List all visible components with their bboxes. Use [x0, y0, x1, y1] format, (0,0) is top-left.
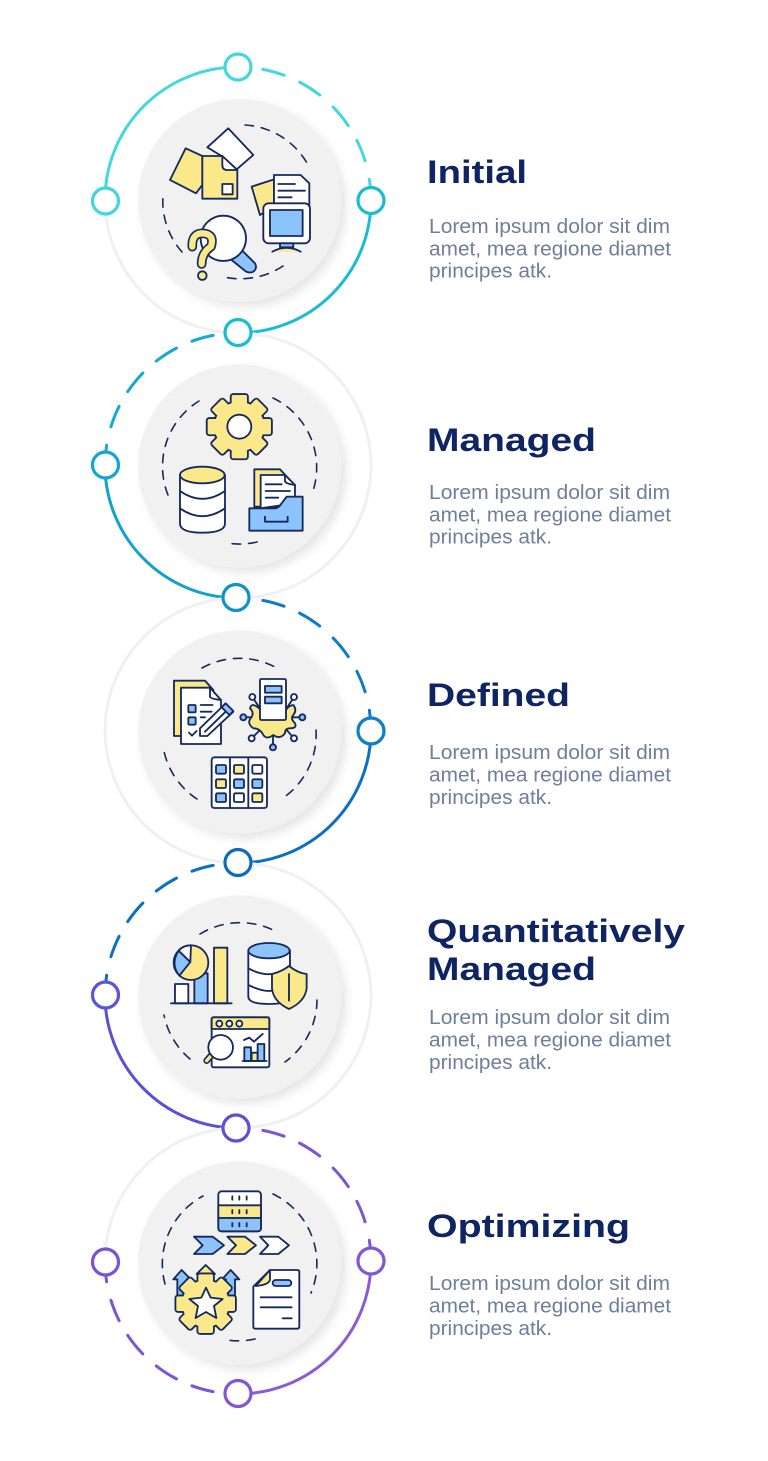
text: Optimizing description: amet, mea regione diamet: [429, 1296, 671, 1318]
text: Initial description: principes atk.: [429, 260, 552, 282]
heading: Initial: Initial: [427, 154, 527, 190]
icon: computer and document: [252, 175, 310, 252]
heading: Defined: Defined: [427, 677, 570, 713]
icon: pie and bar chart: [171, 945, 232, 1003]
step 3: Defined: [105, 598, 671, 863]
disc 2: [138, 364, 341, 568]
text: Managed description: [429, 482, 671, 548]
icon: document: [253, 1270, 299, 1329]
ring 5: [105, 1128, 371, 1394]
heading: Optimizing: Optimizing: [427, 1208, 630, 1244]
text: Managed description: Lorem ipsum dolor sit dim: [429, 482, 670, 504]
dashed inner ring 3: [163, 658, 316, 799]
icon: database with shield: [248, 943, 307, 1009]
disc 5: [138, 1162, 341, 1364]
icon: gear: [208, 395, 271, 458]
icon: server rack: [218, 1191, 261, 1231]
text: Defined description: [429, 742, 671, 809]
text: Quantitatively Managed description: Lorem ipsum dolor sit dim: [429, 1007, 670, 1029]
ring 4: [105, 863, 371, 1128]
text: Initial description: [429, 216, 671, 282]
step 5: Optimizing: [105, 1128, 671, 1394]
text: Managed description: amet, mea regione diamet: [429, 504, 671, 526]
text: Optimizing description: Lorem ipsum dolor sit dim: [429, 1273, 670, 1295]
heading: Quantitatively Managed: Managed: [427, 951, 596, 987]
disc 4: [138, 896, 341, 1098]
icon: browser analytics: [207, 1017, 269, 1067]
icon: table: [212, 757, 267, 808]
icon: folder with document: [249, 469, 303, 531]
dashed inner ring 2: [163, 398, 317, 544]
text: Initial description: amet, mea regione diamet: [429, 238, 671, 260]
text: Managed description: principes atk.: [429, 526, 552, 548]
heading: Quantitatively Managed: Quantitatively: [427, 913, 685, 949]
icon: magnifier with question mark: [192, 216, 256, 280]
text: Defined description: amet, mea regione diamet: [429, 764, 671, 786]
icon: checklist with pencil: [174, 681, 233, 744]
text: Quantitatively Managed description: [429, 1007, 671, 1074]
ring 3: [105, 598, 371, 863]
text: Optimizing description: [429, 1273, 671, 1340]
ring 1: [105, 67, 371, 333]
text: Initial description: Lorem ipsum dolor sit dim: [429, 216, 670, 238]
heading: Managed: Managed: [427, 422, 596, 458]
icon: files: [170, 128, 253, 199]
step 1: Initial: [105, 67, 671, 333]
text: Optimizing description: principes atk.: [429, 1318, 552, 1340]
dashed inner ring 5: [162, 1194, 317, 1341]
icon: process chevrons: [194, 1237, 289, 1254]
step 4: Quantitatively Managed: [105, 863, 685, 1128]
heading: Quantitatively Managed: [427, 913, 685, 987]
text: Defined description: Lorem ipsum dolor sit dim: [429, 742, 670, 764]
step 2: Managed: [105, 333, 671, 598]
ring 2: [105, 333, 371, 598]
connector nodes: [92, 54, 384, 1406]
dashed inner ring 1: [163, 125, 307, 279]
text: Defined description: principes atk.: [429, 787, 552, 809]
disc 1: [138, 99, 341, 302]
icon: database: [180, 467, 225, 533]
text: Quantitatively Managed description: amet, mea regione diamet: [429, 1030, 671, 1052]
disc 3: [138, 630, 341, 834]
dashed inner ring 4: [164, 923, 317, 1062]
text: Quantitatively Managed description: principes atk.: [429, 1052, 552, 1074]
icon: server network: [240, 679, 305, 750]
icon: gear with star and arrows: [173, 1265, 239, 1333]
